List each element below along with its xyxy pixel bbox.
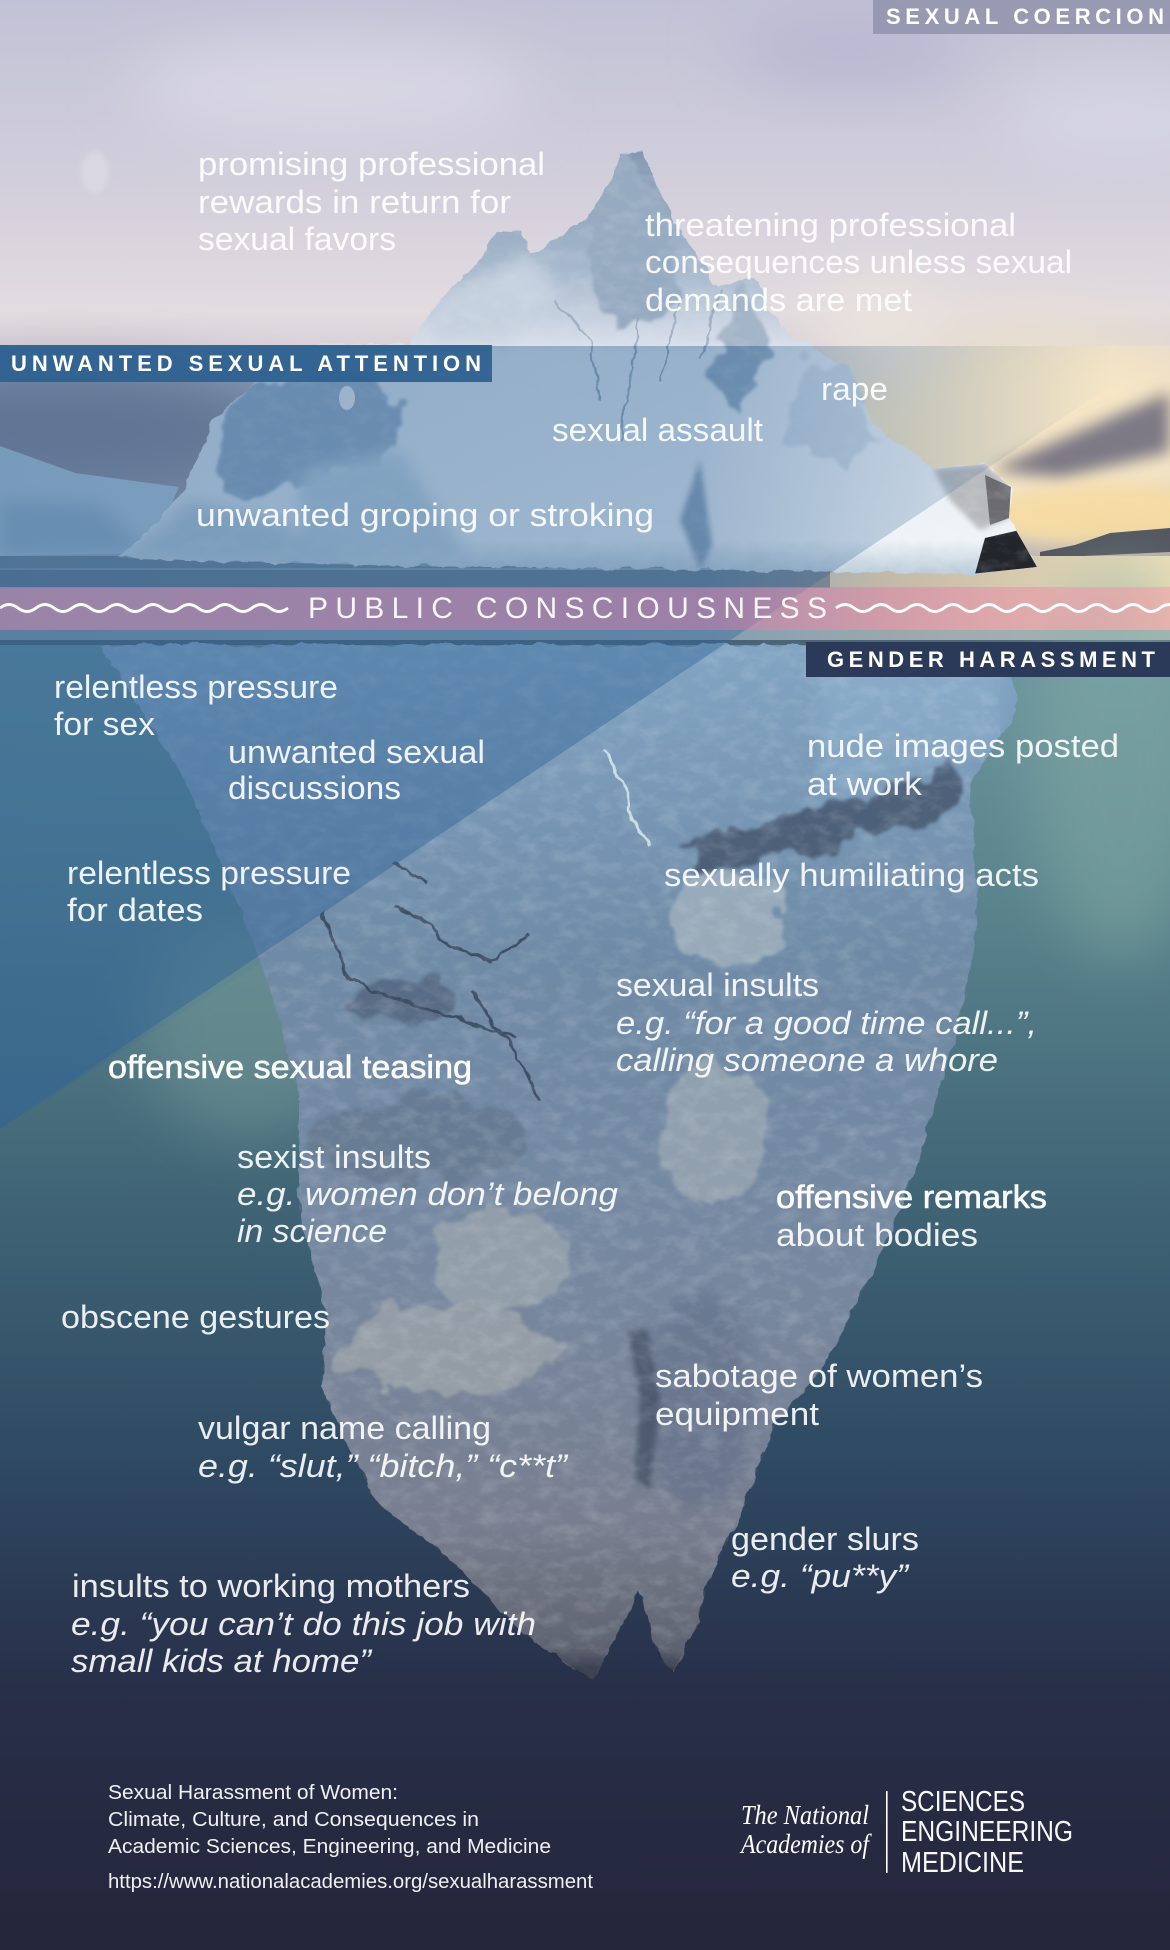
text: obscene gestures: obscene gestures bbox=[61, 1299, 330, 1335]
wave line right bbox=[836, 604, 1170, 612]
text: vulgar name calling: vulgar name calling bbox=[198, 1410, 491, 1446]
label: sexual coercion: SEXUAL COERCION bbox=[886, 4, 1164, 29]
iceberg above water bbox=[100, 150, 1060, 580]
background: underwater gradient bbox=[0, 560, 1170, 1950]
text: unwanted sexual discussions: discussions bbox=[228, 770, 401, 806]
footer: report title and url: Climate, Culture, and Consequences in bbox=[108, 1809, 479, 1831]
text: relentless pressure for dates: relentless pressure bbox=[67, 855, 351, 891]
text: sabotage of women's equipment bbox=[655, 1358, 983, 1432]
background: left ice mound and far shore bbox=[0, 446, 1170, 558]
footer: report title and url: Sexual Harassment of Women: bbox=[108, 1782, 398, 1804]
text: offensive remarks about bodies: offensive remarks bbox=[776, 1179, 1047, 1215]
public consciousness band bbox=[0, 587, 1170, 630]
text: unwanted sexual discussions bbox=[228, 734, 485, 806]
text: nude images posted at work: nude images posted bbox=[807, 728, 1119, 764]
text: gender slurs: gender slurs bbox=[731, 1521, 919, 1557]
text: threatening professional consequences: threatening professional bbox=[645, 207, 1016, 243]
text: relentless pressure for sex: relentless pressure bbox=[54, 669, 338, 705]
text: threatening professional consequences: consequences unless sexual bbox=[645, 244, 1072, 280]
logo: The National Academies bbox=[739, 1786, 1073, 1879]
text: sexual insults: e.g. “for a good time call...”, bbox=[616, 1005, 1037, 1041]
background: sky bbox=[0, 0, 1170, 600]
label: unwanted sexual attention: UNWANTED SEXUAL ATTENTION bbox=[11, 351, 481, 376]
logo: The National Academies: Academies of bbox=[739, 1829, 872, 1859]
label: unwanted sexual attention bbox=[0, 345, 492, 382]
text: gender slurs bbox=[731, 1521, 919, 1594]
text: unwanted groping: unwanted groping or stroking bbox=[196, 497, 654, 533]
text: sexual assault: sexual assault bbox=[552, 412, 763, 448]
band title: PUBLIC CONSCIOUSNESS bbox=[308, 592, 827, 625]
text: sexist insults bbox=[237, 1139, 618, 1249]
overlay: unwanted sexual attention tier triangle bbox=[0, 346, 1170, 1129]
text: insults to working mothers: insults to working mothers bbox=[72, 1568, 470, 1604]
text: relentless pressure for sex bbox=[54, 669, 338, 742]
background: water surface bbox=[0, 556, 1170, 648]
text: sexist insults: sexist insults bbox=[237, 1139, 431, 1175]
text: offensive remarks about bodies bbox=[776, 1179, 1047, 1253]
text: vulgar name calling bbox=[198, 1410, 569, 1484]
label: gender harassment: GENDER HARASSMENT bbox=[827, 647, 1156, 672]
text: insults to working mothers: e.g. “you can’t do this job with bbox=[71, 1606, 536, 1642]
text: sexist insults: in science bbox=[237, 1213, 387, 1249]
text: nude images posted at work: at work bbox=[807, 766, 923, 802]
footer: report title and url: Academic Sciences, Engineering, and Medicine bbox=[108, 1836, 551, 1858]
text: promising professional rewards: promising professional bbox=[198, 146, 545, 182]
text: sexual insults: calling someone a whore bbox=[616, 1042, 998, 1078]
text: promising professional rewards: sexual favors bbox=[198, 221, 396, 257]
text: promising professional rewards bbox=[198, 146, 545, 257]
label: gender harassment bbox=[806, 642, 1170, 677]
text: relentless pressure for sex: for sex bbox=[54, 706, 155, 742]
text: sexual insults bbox=[616, 967, 1037, 1078]
text: promising professional rewards: rewards in return for bbox=[198, 184, 511, 220]
footer: report title and url: https://www.nationalacademies.org/sexualharassment bbox=[108, 1871, 593, 1893]
footer: report title and url bbox=[108, 1782, 593, 1893]
text: sabotage of women's equipment: equipment bbox=[655, 1396, 819, 1432]
text: offensive sexual teasing: offensive sexual teasing bbox=[108, 1049, 472, 1085]
logo: The National Academies: ENGINEERING bbox=[901, 1816, 1073, 1848]
text: vulgar name calling: e.g. “slut,” “bitch,” “c**t” bbox=[198, 1448, 569, 1484]
text: gender slurs: e.g. “pu**y” bbox=[731, 1558, 909, 1594]
text: rape: rape bbox=[821, 371, 888, 407]
logo: The National Academies: MEDICINE bbox=[901, 1847, 1024, 1879]
text: insults to working mothers: small kids at home” bbox=[71, 1643, 372, 1679]
text: relentless pressure for dates bbox=[67, 855, 351, 928]
iceberg below water bbox=[100, 645, 1019, 1695]
text: threatening professional consequences bbox=[645, 207, 1072, 318]
text: offensive remarks about bodies: about bodies bbox=[776, 1217, 978, 1253]
logo: The National Academies: The National bbox=[741, 1800, 869, 1830]
text: sexist insults: e.g. women don’t belong bbox=[237, 1176, 618, 1212]
text: threatening professional consequences: demands are met bbox=[645, 282, 912, 318]
text: nude images posted at work bbox=[807, 728, 1119, 802]
text: sabotage of women's equipment: sabotage of women’s bbox=[655, 1358, 983, 1394]
text: insults to working mothers bbox=[71, 1568, 536, 1679]
overlay: sexual coercion tier haze bbox=[0, 0, 1170, 346]
label: sexual coercion bbox=[873, 0, 1170, 34]
text: unwanted sexual discussions: unwanted sexual bbox=[228, 734, 485, 770]
text: sexual insults: sexual insults bbox=[616, 967, 819, 1003]
text: sexually humiliating acts: sexually humiliating acts bbox=[664, 857, 1039, 893]
text: relentless pressure for dates: for dates bbox=[67, 892, 203, 928]
wave line left bbox=[0, 604, 288, 612]
logo: The National Academies: SCIENCES bbox=[901, 1786, 1025, 1818]
